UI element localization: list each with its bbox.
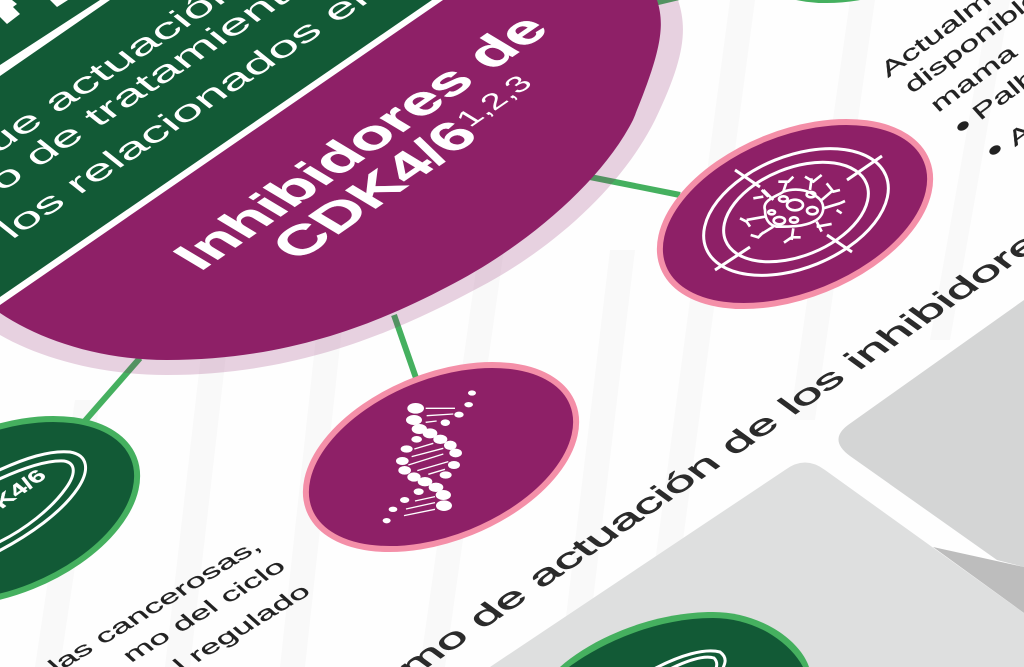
heading: Inhibidores de CDK4/6: Inhibidores de <box>161 7 561 278</box>
icon: target cell circle <box>633 86 957 342</box>
cancer cell <box>740 175 845 243</box>
heading: Inhibidores de CDK4/6: CDK4/6 <box>259 113 491 268</box>
text: right description <box>875 0 1024 156</box>
DNA helix <box>383 390 476 523</box>
connector lines <box>84 0 700 422</box>
panel: central circle <box>0 0 683 375</box>
icon: top green circle <box>716 0 1024 36</box>
kinase capsule <box>0 452 86 553</box>
text: right description: mama <box>925 40 1023 117</box>
panel: green banner <box>0 0 443 305</box>
target rings <box>685 124 907 300</box>
icon: DNA circle <box>279 329 603 585</box>
text: left description: mo del ciclo <box>117 556 291 666</box>
panel: mechanism fold shadow <box>933 547 1024 613</box>
heading: Inhibidores de CDK4/6: 1,2,3 <box>448 70 539 131</box>
panel: mechanism upper card <box>838 300 1024 567</box>
icon: lower green circle <box>560 612 809 667</box>
panel: mechanism lower card <box>490 462 1024 667</box>
icon: CDK4/6 circle <box>0 383 164 639</box>
